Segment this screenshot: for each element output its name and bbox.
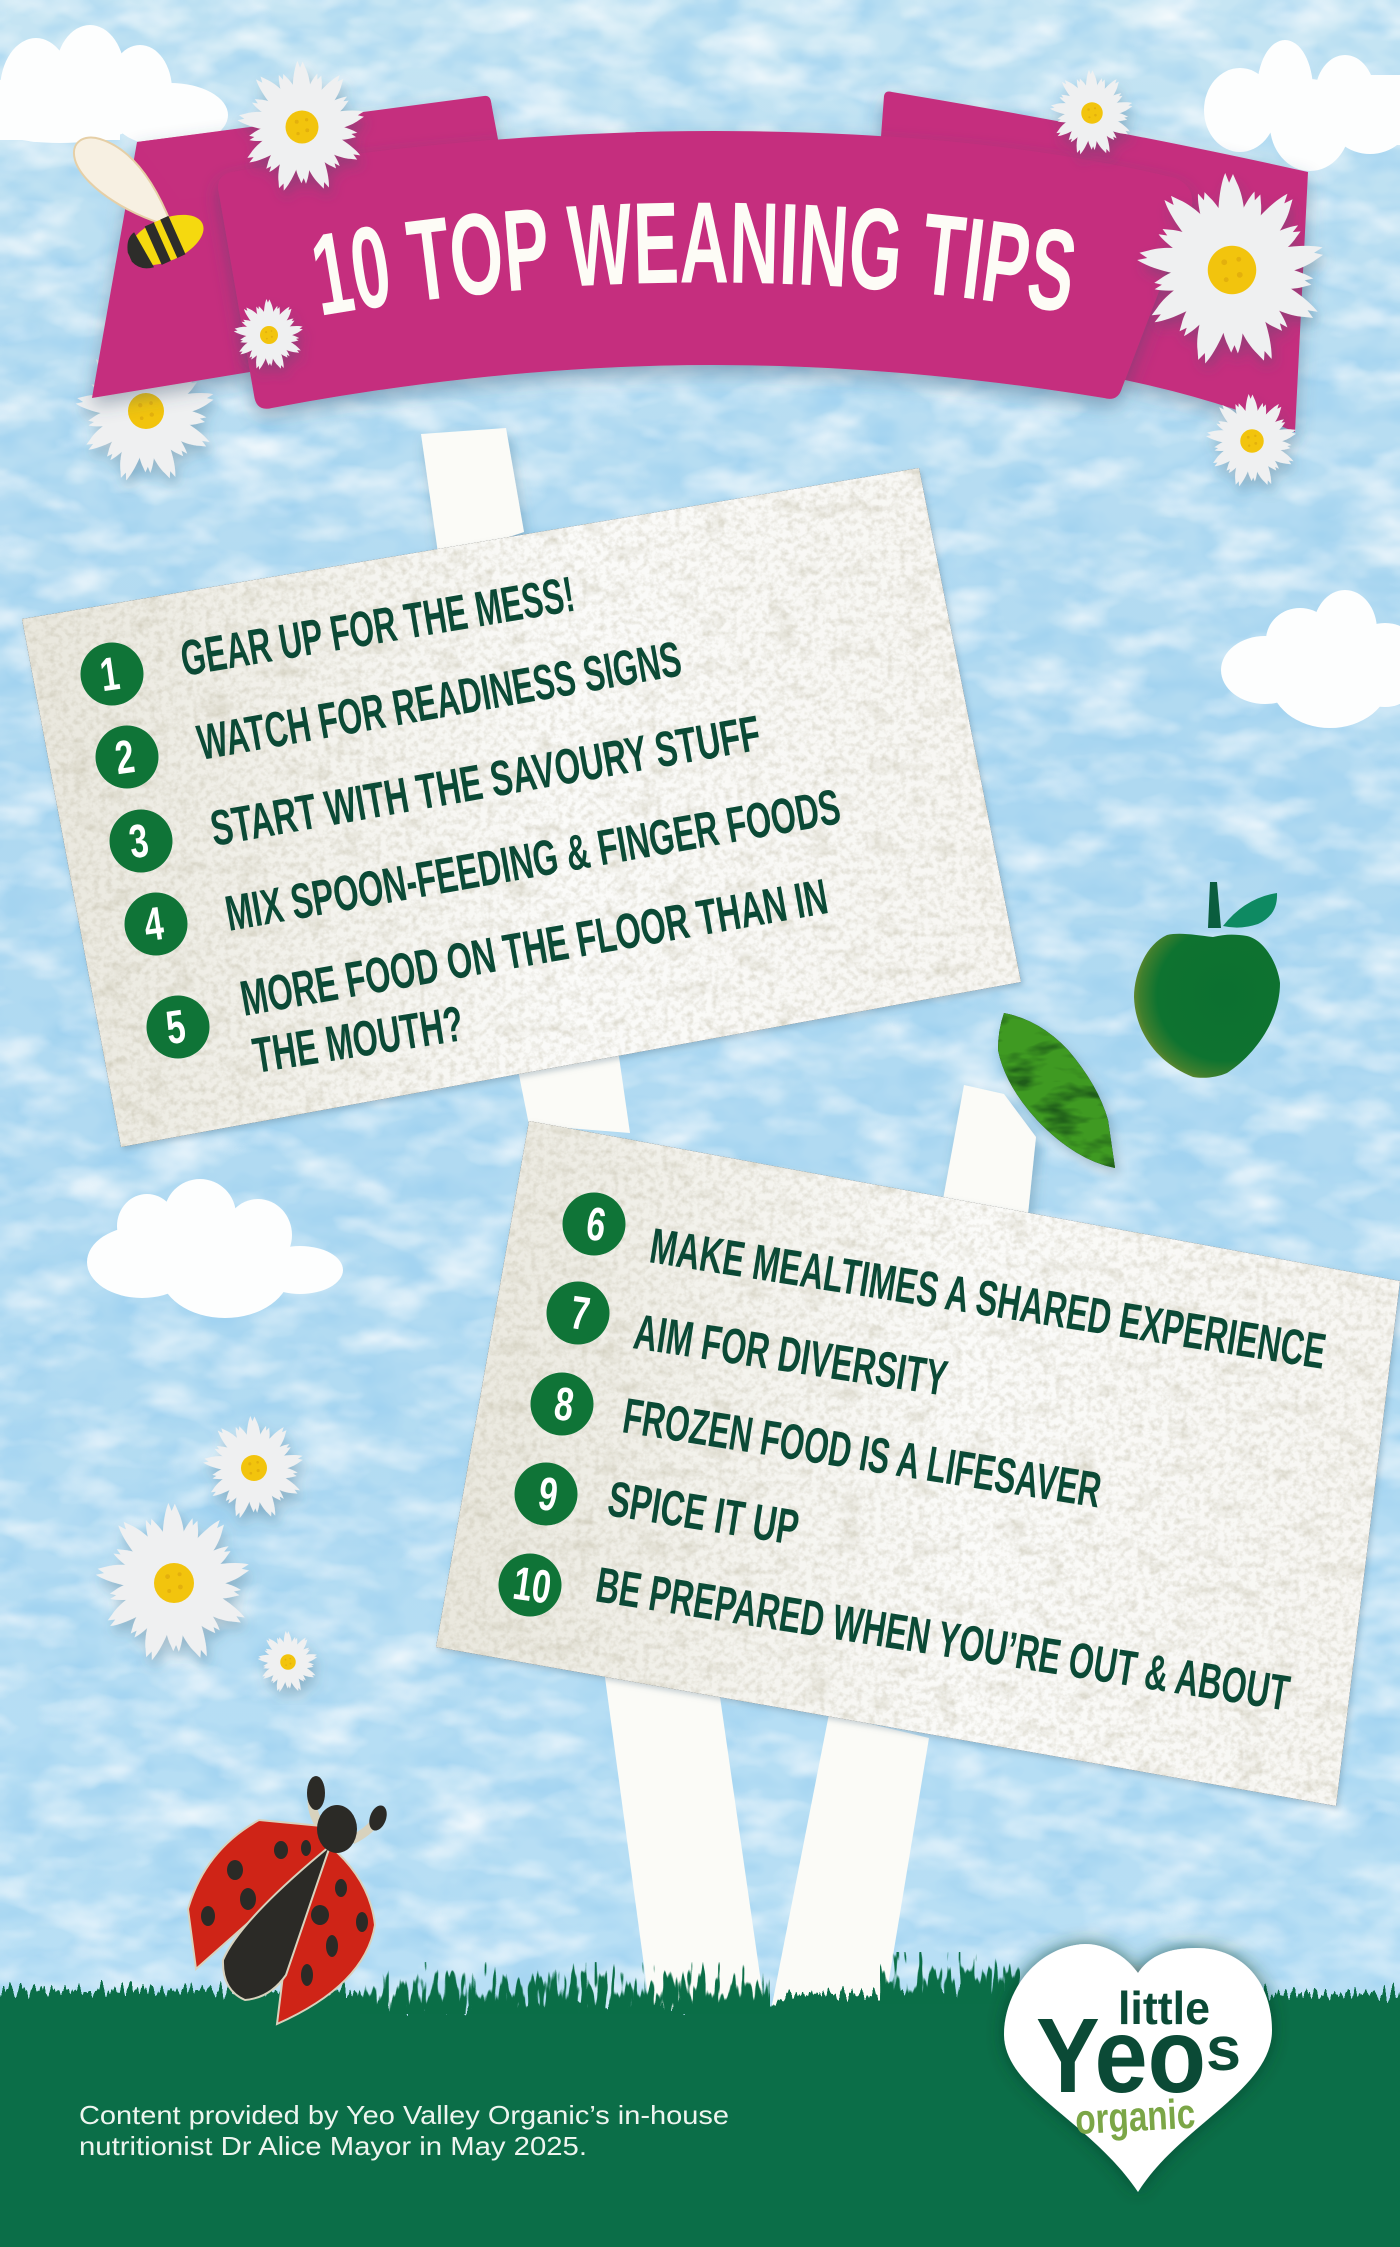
ladybird right wing: [277, 1846, 375, 2024]
daisy, lower left group large: [95, 1503, 251, 1662]
tip 4 text: MIX SPOON-FEEDING & FINGER FOODS: [221, 779, 844, 942]
tip 1 badge: 1: [97, 647, 123, 702]
ladybird body: [223, 1846, 330, 2000]
tip 1 badge: [80, 642, 144, 706]
panel: sign one, tips 1 to 5: [22, 468, 1021, 1147]
panel: sign two, tips 6 to 10: [436, 1121, 1400, 1806]
logo word little: little: [1118, 1982, 1210, 2034]
credit text: [79, 2100, 729, 2161]
tip 2 text: WATCH FOR READINESS SIGNS: [193, 631, 685, 771]
tip 2 badge: [96, 726, 158, 788]
credit text: Content provided by Yeo Valley Organic’s in-house: [79, 2100, 729, 2130]
icon: green leaf: [998, 1013, 1115, 1168]
tip 5 text: THE MOUTH?: [249, 995, 467, 1084]
tip 9 text: SPICE IT UP: [604, 1471, 803, 1556]
banner: back right ribbon: [880, 92, 1308, 432]
grass: [0, 1952, 1400, 2247]
icon: apple: [1134, 882, 1280, 1078]
tip 4 badge: [124, 892, 188, 956]
tip 1 text: GEAR UP FOR THE MESS!: [177, 566, 578, 687]
credit text: nutritionist Dr Alice Mayor in May 2025.: [79, 2131, 587, 2161]
banner: main panel: [218, 131, 1192, 409]
daisy on banner, top right: [1049, 70, 1134, 155]
cloud: top left: [0, 25, 228, 147]
tip 3 badge: [110, 810, 172, 872]
sign post: right lower post: [771, 1714, 929, 2010]
sign post: left lower post: [604, 1670, 765, 2010]
tip 4 badge: 4: [141, 897, 167, 952]
tip 8 badge: 8: [551, 1377, 577, 1432]
logo letter s: s: [1206, 2015, 1241, 2084]
logo word organic: organic: [1074, 2090, 1196, 2143]
sign two board: [436, 1121, 1400, 1806]
tip 5 text: [236, 868, 832, 1084]
tip 6 badge: 6: [583, 1197, 609, 1252]
tip 10 badge: [498, 1554, 562, 1616]
daisy behind banner, left: [75, 339, 216, 482]
tip 8 badge: [530, 1372, 594, 1436]
tip 2 badge: 2: [112, 730, 138, 785]
sign post: right post top: [942, 1085, 1036, 1224]
ladybird antennae: [312, 1790, 375, 1840]
ladybird spots: [201, 1840, 368, 1986]
cloud: right middle: [1221, 590, 1400, 728]
banner: back left ribbon: [92, 97, 500, 398]
icon: ladybird: [188, 1776, 390, 2024]
sign post: left post top: [421, 428, 524, 560]
cloud: left middle: [87, 1179, 343, 1318]
logo word Yeo: Yeo: [1036, 1997, 1206, 2115]
tip 5 text: MORE FOOD ON THE FLOOR THAN IN: [236, 868, 832, 1027]
logo: Little Yeos organic heart: [1004, 1944, 1272, 2192]
title: [314, 202, 1074, 316]
sign post: left post middle: [516, 1050, 630, 1133]
apple body: [1134, 934, 1280, 1078]
tip 10 badge: 10: [510, 1556, 555, 1614]
logo heart: [1004, 1944, 1272, 2192]
tip 3 text: START WITH THE SAVOURY STUFF: [206, 705, 764, 857]
daisy on banner, top left: [237, 61, 366, 192]
title: 10 TOP WEANING TIPS: [314, 202, 1074, 316]
daisy, lower left group top: [203, 1416, 304, 1519]
apple stem: [1208, 882, 1221, 928]
tip 9 badge: 9: [535, 1467, 561, 1522]
tip 7 badge: [546, 1282, 610, 1344]
daisy on banner, small left: [233, 299, 304, 371]
tip 6 badge: [562, 1192, 626, 1256]
tip 9 badge: [514, 1462, 578, 1526]
tip 7 badge: 7: [567, 1286, 593, 1341]
apple leaf: [1223, 893, 1277, 928]
daisy on banner, large right: [1136, 173, 1326, 366]
tip 3 badge: 3: [126, 814, 152, 869]
sign one board: [22, 468, 1021, 1147]
tip 5 badge: 5: [163, 1000, 189, 1055]
ladybird head: [317, 1805, 357, 1853]
icon: bee: [74, 138, 211, 275]
daisy on banner, lower right: [1206, 394, 1297, 487]
daisy, lower left group small: [257, 1631, 318, 1693]
tip 8 text: FROZEN FOOD IS A LIFESAVER: [619, 1388, 1105, 1518]
tip 5 badge: [146, 996, 210, 1058]
banner: back left ribbon top tab: [137, 96, 500, 200]
cloud: top right: [1204, 40, 1400, 171]
tip 7 text: AIM FOR DIVERSITY: [630, 1304, 951, 1407]
ladybird left wing: [188, 1820, 330, 1969]
